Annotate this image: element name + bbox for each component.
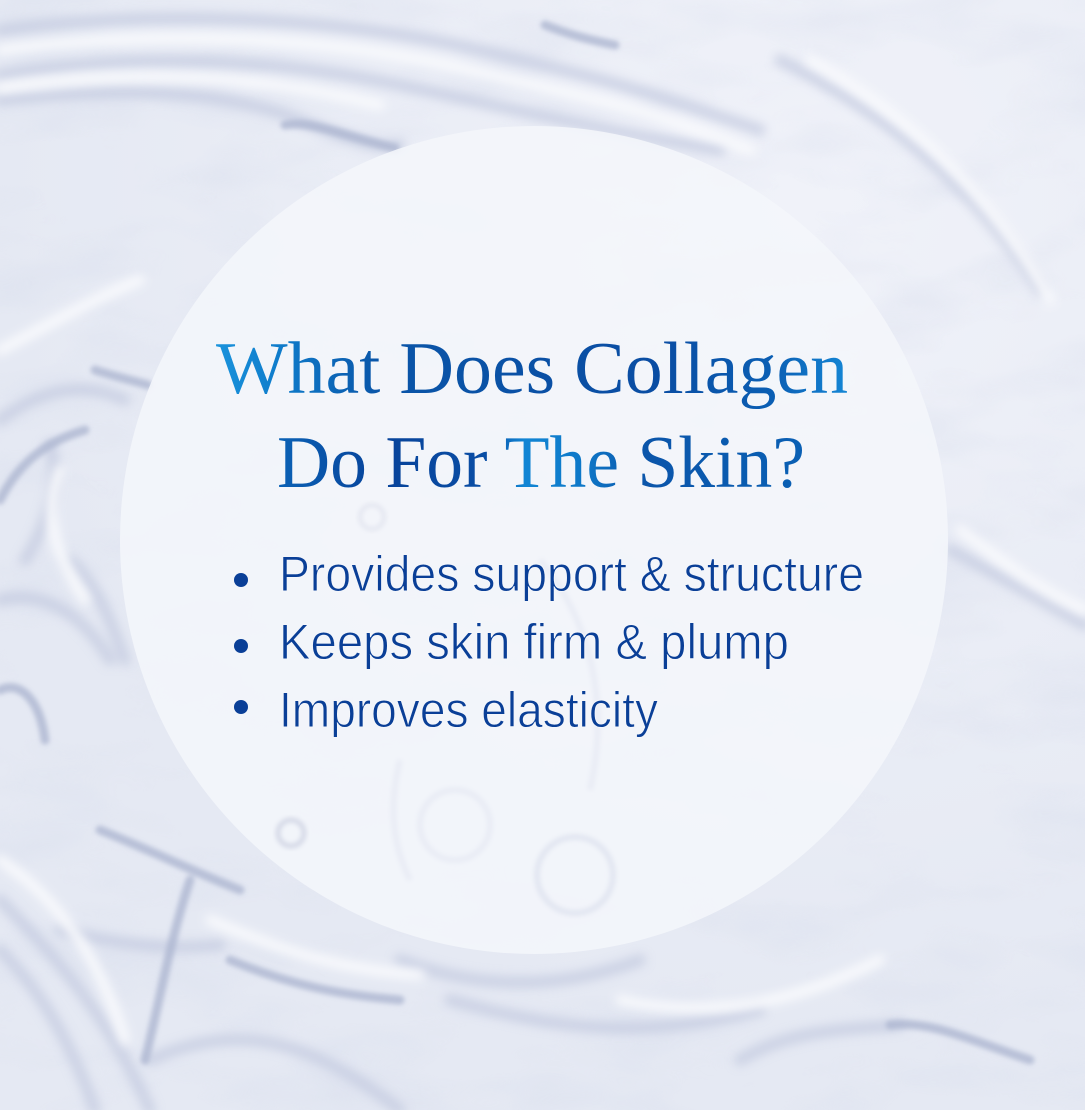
title: Do For The Skin? [277, 422, 805, 504]
title: What Does Collagen [216, 328, 848, 410]
circle panel [120, 126, 948, 954]
title [216, 328, 848, 504]
bullet item: support and structure: Provides support & structure [279, 546, 864, 602]
bullet item: firm and plump: Keeps skin firm & plump [279, 614, 789, 670]
bullet list [234, 546, 864, 738]
bullet item: elasticity: Improves elasticity [279, 682, 658, 738]
